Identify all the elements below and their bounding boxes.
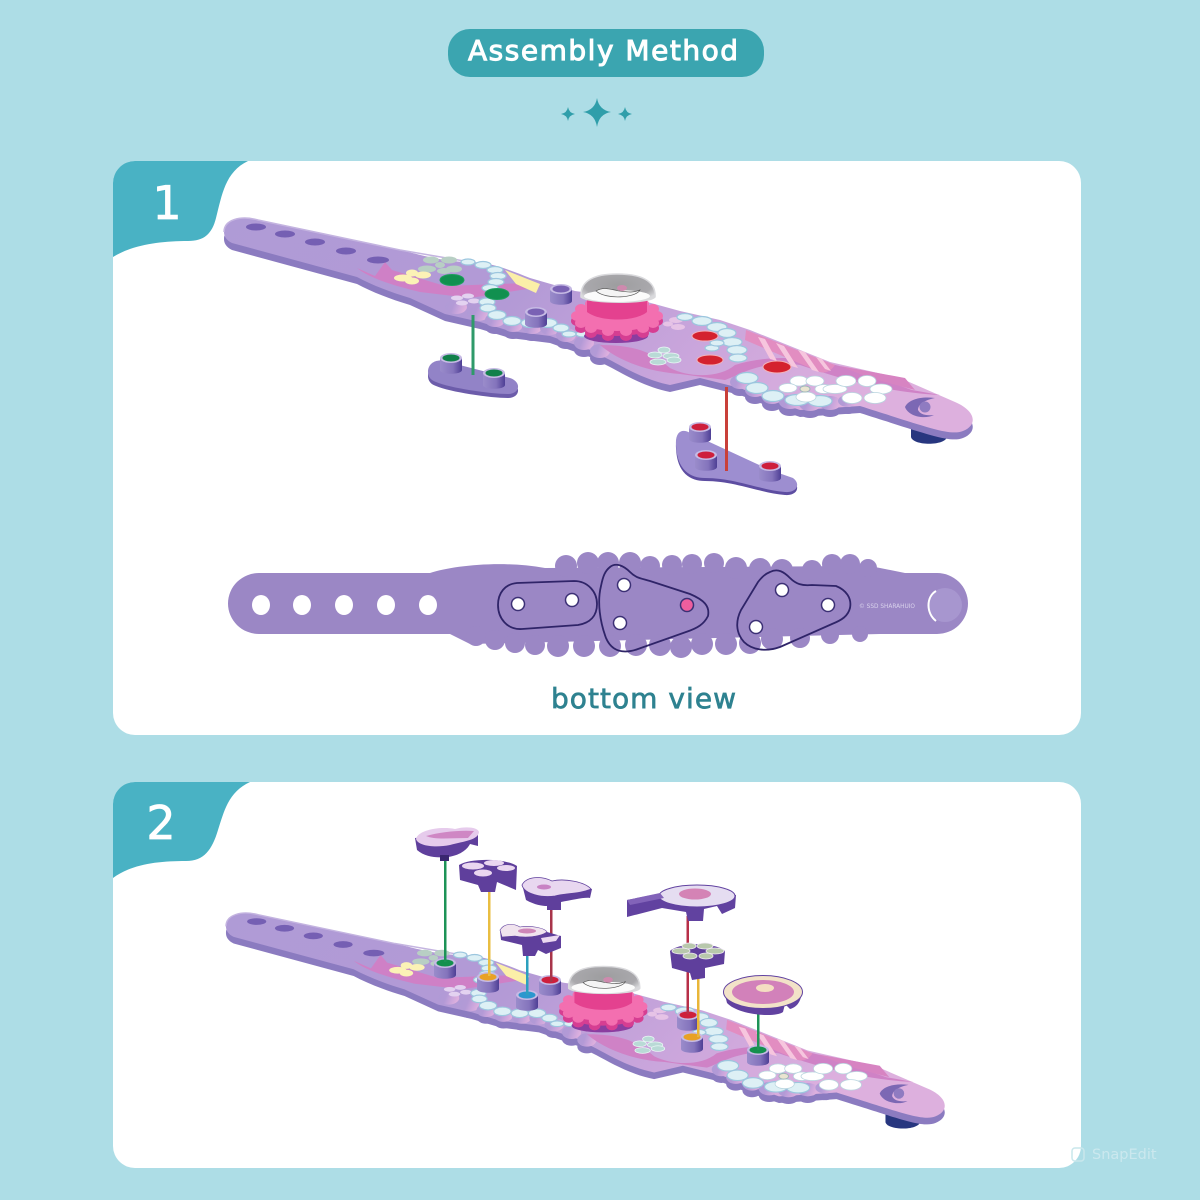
assembly guide lines — [444, 858, 760, 1050]
bottom view bracelet — [228, 552, 968, 658]
green connector plate — [428, 315, 518, 398]
title pill — [448, 29, 764, 77]
step 1 number tab: 1 — [152, 176, 182, 230]
bottom view label: bottom view — [551, 682, 736, 715]
red connector plate — [676, 387, 797, 495]
bracelet top view with red and green parts — [224, 218, 973, 444]
icon: sparkles — [561, 98, 632, 127]
piece: flower — [459, 860, 517, 892]
piece: round lollipop — [627, 885, 736, 921]
bottom view bracelet: © SSD SHARAHUIO — [859, 602, 915, 610]
step 2 number tab: 2 — [146, 796, 176, 850]
piece: donut — [724, 976, 802, 1015]
step 1 number tab — [113, 161, 248, 257]
panel: step 1 — [113, 161, 1081, 735]
title pill: Assembly Method — [468, 34, 738, 67]
step 2 number tab — [113, 782, 250, 878]
watermark: SnapEdit: SnapEdit — [1092, 1147, 1157, 1163]
panel: step 2 — [113, 782, 1081, 1168]
piece: candy — [415, 827, 479, 861]
bracelet assembled view — [226, 913, 945, 1129]
piece: heart — [522, 878, 592, 910]
piece: small donut charm — [500, 924, 561, 956]
piece: green flower — [670, 943, 725, 980]
